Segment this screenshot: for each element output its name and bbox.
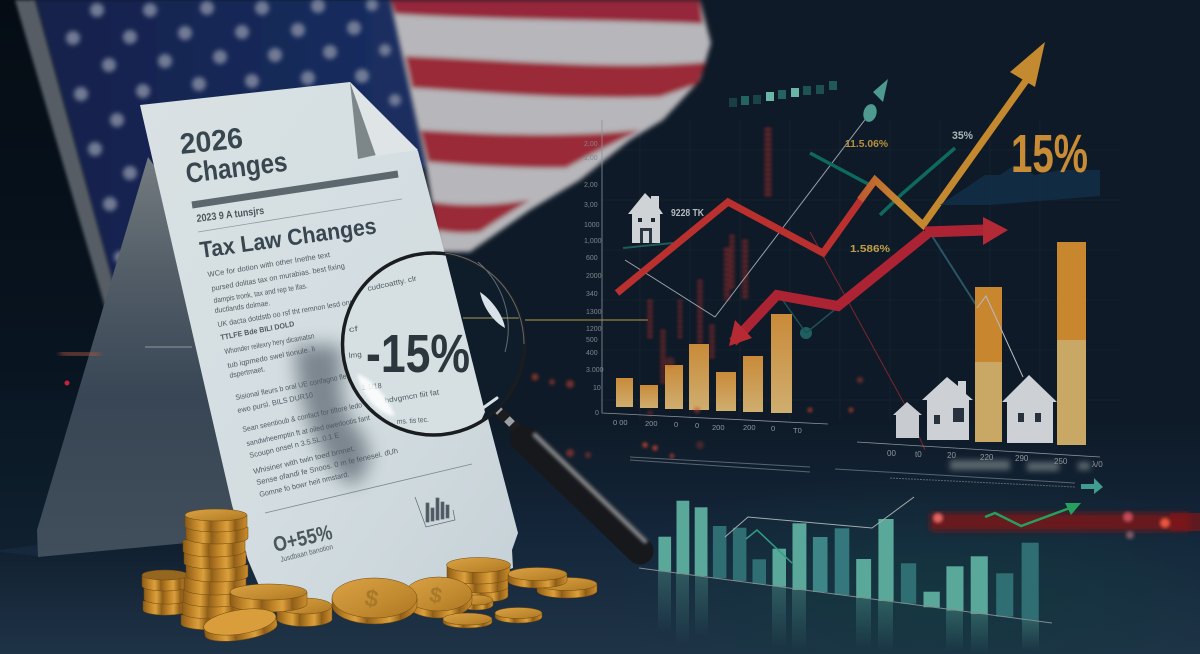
- left coin stack: [142, 570, 189, 615]
- teal lines: [810, 148, 955, 215]
- medium coin with symbol: [405, 577, 472, 618]
- document body text: sandwheemptin ft at oiled owerlootis fant: [246, 413, 371, 448]
- x axis labels: 0 00: [613, 418, 628, 427]
- teal arrow marker: [861, 79, 888, 123]
- heading rule: [192, 174, 398, 205]
- lens contents: cf: [348, 324, 360, 334]
- document body text: tub iqpmedo swel tionule. li: [227, 344, 316, 370]
- tall bar B: [1057, 242, 1086, 445]
- icon: house: [623, 193, 673, 248]
- y axis labels: 1,00: [584, 155, 598, 162]
- medium coin with symbol: $: [428, 582, 444, 609]
- gold coins: [142, 509, 597, 645]
- thin red down line: [810, 232, 925, 450]
- table surface: [0, 420, 1200, 654]
- axis labels: 290: [1015, 454, 1029, 463]
- x axis labels: 0: [695, 421, 699, 430]
- flag pole: [14, 0, 113, 307]
- magnifier shadow on page: [295, 345, 369, 485]
- label: 35%: 35%: [952, 130, 973, 142]
- folded corner: [350, 82, 418, 159]
- axis labels: 20: [947, 451, 956, 460]
- tall bar A: [975, 287, 1002, 442]
- tiny coin: [495, 608, 542, 623]
- sheet highlight line: [145, 346, 192, 348]
- y axis labels: 10: [593, 385, 601, 392]
- overlay green line: [746, 530, 792, 563]
- axis labels: 00: [887, 449, 896, 458]
- icon: medium house: [922, 377, 973, 440]
- blurred labels: [950, 460, 1090, 471]
- red glow band: [930, 512, 1200, 539]
- label: 15%: 15%: [1011, 124, 1088, 184]
- lens contents: hdvgmcn fiit fat: [384, 387, 441, 405]
- teal bar chart: [639, 497, 1052, 654]
- y axis labels: 2000: [586, 273, 602, 280]
- x axis labels: 200: [712, 423, 725, 432]
- label: 11.506%: 11.5.06%: [845, 138, 889, 150]
- lens highlight: [480, 292, 505, 328]
- lens contents: ms. tis tec.: [397, 415, 429, 426]
- green arrow: [985, 503, 1081, 526]
- icon: mini bar chart: [415, 497, 455, 527]
- x axis labels: 0: [771, 424, 775, 433]
- heading: 2026 Changes: [178, 123, 289, 189]
- axis labels: λ/0: [1092, 460, 1103, 469]
- lower axis rules: [630, 457, 1075, 487]
- tax document: [140, 82, 518, 605]
- document body text: Sean seentioub & confact for tiftore ledo: [242, 400, 363, 434]
- thin grey trend line: [625, 117, 867, 317]
- heading: 2026 Changes: Changes: [184, 146, 289, 189]
- faint red data columns: [650, 128, 768, 385]
- stat: O+55%: O+55%: [271, 521, 335, 557]
- inner ring reflection: [445, 253, 524, 352]
- tilted coin: [202, 604, 279, 645]
- baseline: [639, 568, 1052, 623]
- document body text: dampis tronk, tax and rep te lfas.: [213, 281, 308, 305]
- tiny coin: [443, 613, 492, 628]
- flag stripes: [390, 0, 711, 252]
- small coin: [460, 595, 493, 610]
- lens value: -15%: -15%: [366, 324, 470, 384]
- reflections: [658, 572, 1039, 654]
- orange bars: [616, 314, 792, 413]
- document body text: Sense ofandi fe Snoos. 0 m fe fenesel. dUh: [255, 446, 399, 487]
- left chart: [525, 120, 828, 435]
- line charts: [617, 42, 1100, 450]
- document body text: Sisional fleurs b oral UE confagno fle: [235, 372, 347, 402]
- red arrow: [729, 217, 1008, 346]
- document body text: Whisiner with twin toed brnnet.: [252, 444, 356, 476]
- icon: large house: [1002, 375, 1057, 443]
- coin: [277, 598, 332, 626]
- document body text: ewo pursl. BILS DUR10: [237, 390, 314, 415]
- sub heading: 2023 9 A tunsjrs: [196, 205, 265, 225]
- main red-to-gold line: [617, 75, 1030, 293]
- red streak: [60, 353, 100, 355]
- large coin with symbol: [332, 578, 417, 624]
- decorative grid: [600, 120, 1120, 420]
- document body text: pursed dolitas tax on murabias. best fixing: [211, 261, 345, 293]
- x axis labels: 0: [674, 420, 678, 429]
- teal floor glow: [620, 440, 1200, 654]
- teal arrow: [1081, 478, 1103, 494]
- dark left wall: [0, 0, 115, 550]
- large coin with symbol: $: [363, 585, 381, 614]
- document body text: Whonder reilexry hery dicamatsn: [224, 331, 315, 356]
- teal indicator blocks: [729, 81, 837, 107]
- heading: Tax Law Changes: Tax Law Changes: [198, 212, 378, 263]
- icon: small house: [893, 402, 922, 438]
- flat coin: [230, 584, 307, 612]
- lens contents: lmg: [348, 350, 362, 360]
- trend line over bars: [977, 296, 1023, 377]
- lower divider: [265, 464, 472, 513]
- connector line: [777, 292, 838, 333]
- document body text: Gomne fo bowr heit nmstard.: [258, 469, 350, 499]
- glowing red particles: [532, 357, 863, 458]
- document body text: Scoupn onsel n 3.5.5L.0.1 E: [248, 430, 340, 460]
- y axis labels: 340: [586, 291, 598, 298]
- document body text: TTLFE Bde BILI DOLD: [220, 319, 296, 342]
- document body text: UK dacta dotdstb oo rsf tht remnon lesd onrgn: [217, 296, 360, 329]
- y axis labels: 1000: [584, 222, 600, 229]
- y axis labels: 0: [595, 410, 599, 417]
- blue down trend line: [927, 228, 978, 308]
- back right coin: [537, 578, 597, 598]
- blue area silhouette: [940, 165, 1100, 205]
- document body text: dspertmaet.: [229, 364, 266, 380]
- x axis labels: 200: [743, 423, 756, 432]
- y axis labels: 3,00: [584, 202, 598, 209]
- y axis labels: 400: [586, 350, 598, 357]
- axis labels: 220: [980, 453, 994, 462]
- x axis labels: T0: [793, 426, 802, 435]
- right coin stack: [446, 558, 510, 602]
- right coin: [508, 568, 567, 588]
- document body text: WCe for dotion with other Inethe text: [207, 250, 332, 279]
- y axis labels: 500: [586, 337, 598, 344]
- document page: [140, 82, 518, 605]
- document body text: [207, 250, 399, 499]
- x axis labels: [613, 418, 802, 435]
- chart axes: [602, 120, 828, 424]
- lens contents: [344, 256, 519, 428]
- axis line: [857, 442, 1100, 457]
- left table: [0, 536, 240, 654]
- right bar and house chart: [857, 242, 1103, 469]
- stat caption: Jusdbaan banotion: [279, 542, 334, 564]
- y axis labels: 1,000: [584, 238, 602, 245]
- x axis labels: 200: [645, 419, 658, 428]
- lens contents: cudcoattty. clr: [367, 274, 418, 293]
- y axis labels: 2,00: [584, 182, 598, 189]
- axis labels: [887, 449, 1103, 469]
- axis labels: 250: [1054, 457, 1068, 466]
- bars: [658, 501, 1039, 621]
- y axis labels: 2,00: [584, 141, 598, 148]
- lens contents: 1.1/18: [361, 381, 382, 392]
- y axis labels: 1200: [586, 326, 602, 333]
- overlay grey line: [725, 497, 914, 537]
- flag canton: [35, 0, 428, 300]
- axis labels: t0: [915, 450, 922, 459]
- handle: [494, 406, 645, 551]
- document body text: ductlands dolmae.: [214, 298, 271, 315]
- lens ring: [342, 253, 524, 435]
- y axis labels: [584, 141, 604, 417]
- flag: [15, 0, 711, 335]
- y axis labels: 3.000: [586, 367, 604, 374]
- label: house value: 9228 TK: [671, 208, 705, 219]
- thin divider: [198, 199, 402, 232]
- label: 1.506%: 1.586%: [850, 243, 891, 255]
- y axis labels: 600: [586, 255, 598, 262]
- tall coin stack: [181, 509, 248, 630]
- paper back sheet: [37, 157, 250, 557]
- pointer line: [525, 319, 648, 321]
- heading: 2026 Changes: 2026: [178, 123, 244, 161]
- red dot: [64, 380, 70, 386]
- magnifying glass: [335, 245, 645, 551]
- gold arrowhead: [1010, 42, 1045, 87]
- teal marker node: [800, 327, 812, 339]
- y axis labels: 1300: [586, 309, 602, 316]
